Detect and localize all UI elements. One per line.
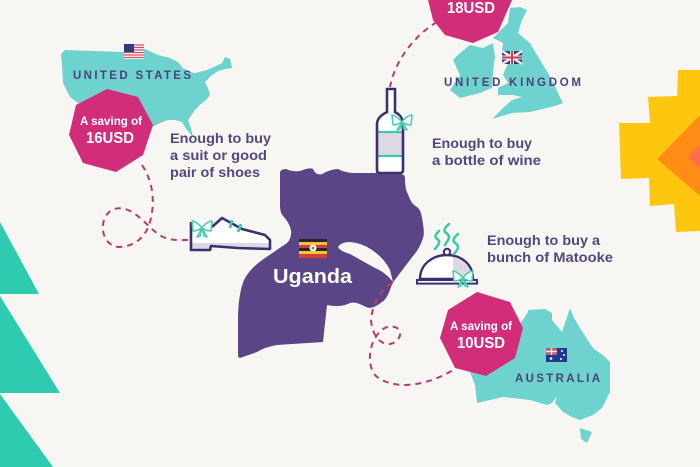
label: Uganda: Uganda <box>273 266 353 288</box>
badge: US saving: A saving of <box>80 114 143 128</box>
flag: Uganda <box>299 239 327 258</box>
label: United Kingdom: UNITED KINGDOM <box>444 77 581 89</box>
flag: Australia <box>546 348 567 362</box>
map: Uganda <box>238 168 424 358</box>
badge: US saving: 16USD <box>86 130 134 147</box>
icon: cloche with steam <box>417 224 477 287</box>
text: wine: Enough to buy <box>432 135 532 151</box>
badge: UK saving <box>428 0 512 43</box>
text: matooke <box>487 232 613 265</box>
map: United Kingdom <box>450 7 563 119</box>
text: shoes <box>170 130 271 180</box>
decorative triangles: left edge <box>0 222 60 467</box>
badge: US saving <box>69 89 153 172</box>
label: United States: UNITED STATES <box>73 70 191 82</box>
flag: United Kingdom <box>502 51 522 64</box>
badge: Australia saving: A saving of <box>450 319 513 333</box>
text: matooke: bunch of Matooke <box>487 249 613 265</box>
badge: UK saving: 18USD <box>447 0 495 17</box>
dashed path: Uganda to Australia via cloche <box>370 283 455 385</box>
decorative stepped sun: right edge <box>619 70 700 232</box>
text: shoes: pair of shoes <box>170 164 260 180</box>
dashed path: United Kingdom to bottle <box>390 22 437 87</box>
text: wine <box>432 135 541 168</box>
icon: shoe <box>191 218 270 250</box>
text: matooke: Enough to buy a <box>487 232 600 248</box>
text: shoes: Enough to buy <box>170 130 271 146</box>
label: Australia: AUSTRALIA <box>515 373 600 385</box>
flag: United States <box>124 44 144 59</box>
badge: Australia saving <box>440 292 523 376</box>
text: wine: a bottle of wine <box>432 152 541 168</box>
icon: wine bottle <box>377 89 412 173</box>
dashed path: United States to shoe <box>103 165 188 247</box>
map: United States <box>61 49 232 137</box>
badge: Australia saving: 10USD <box>457 335 505 352</box>
map: Australia <box>470 308 610 443</box>
text: shoes: a suit or good <box>170 147 267 163</box>
